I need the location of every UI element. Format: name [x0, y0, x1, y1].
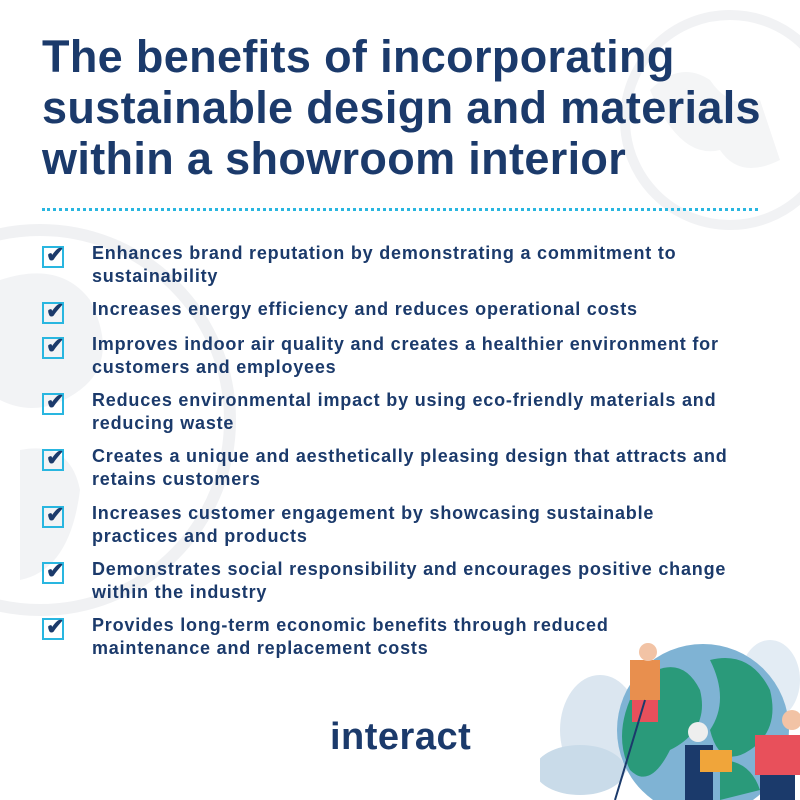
item 8: maintenance and replacement costs: [92, 638, 429, 658]
item 5: [42, 445, 728, 488]
logo: interact: [330, 716, 471, 758]
item 5: ✔: [46, 445, 64, 470]
item 4: [42, 389, 716, 433]
item 3: [42, 333, 719, 377]
item 8: ✔: [46, 614, 64, 639]
title: [42, 31, 761, 184]
item 1: [42, 242, 676, 286]
illustration: globe with people: [540, 640, 800, 800]
title: within a showroom interior: [42, 133, 626, 184]
item 6: ✔: [46, 502, 64, 527]
item 1: sustainability: [92, 266, 218, 286]
item 8: Provides long-term economic benefits through reduced: [92, 615, 609, 635]
item 3: Improves indoor air quality and creates a healthier environment for: [92, 334, 719, 354]
title: The benefits of incorporating: [42, 31, 675, 82]
item 4: ✔: [46, 389, 64, 414]
item 7: Demonstrates social responsibility and encourages positive change: [92, 559, 726, 579]
item 5: Creates a unique and aesthetically pleasing design that attracts and: [92, 446, 728, 466]
item 5: retains customers: [92, 468, 261, 488]
item 8: [42, 614, 609, 658]
item 2: Increases energy efficiency and reduces operational costs: [92, 299, 638, 319]
item 3: customers and employees: [92, 356, 336, 376]
item 1: ✔: [46, 242, 64, 267]
item 2: ✔: [46, 298, 64, 323]
item 7: ✔: [46, 558, 64, 583]
item 3: ✔: [46, 333, 64, 358]
item 7: [42, 558, 726, 602]
item 7: within the industry: [92, 582, 267, 602]
item 4: reducing waste: [92, 412, 234, 432]
item 6: Increases customer engagement by showcasing sustainable: [92, 503, 654, 523]
item 1: Enhances brand reputation by demonstrating a commitment to: [92, 243, 676, 263]
item 4: Reduces environmental impact by using eco-friendly materials and: [92, 390, 716, 410]
title: sustainable design and materials: [42, 82, 761, 133]
item 6: practices and products: [92, 526, 308, 546]
item 6: [42, 502, 654, 546]
